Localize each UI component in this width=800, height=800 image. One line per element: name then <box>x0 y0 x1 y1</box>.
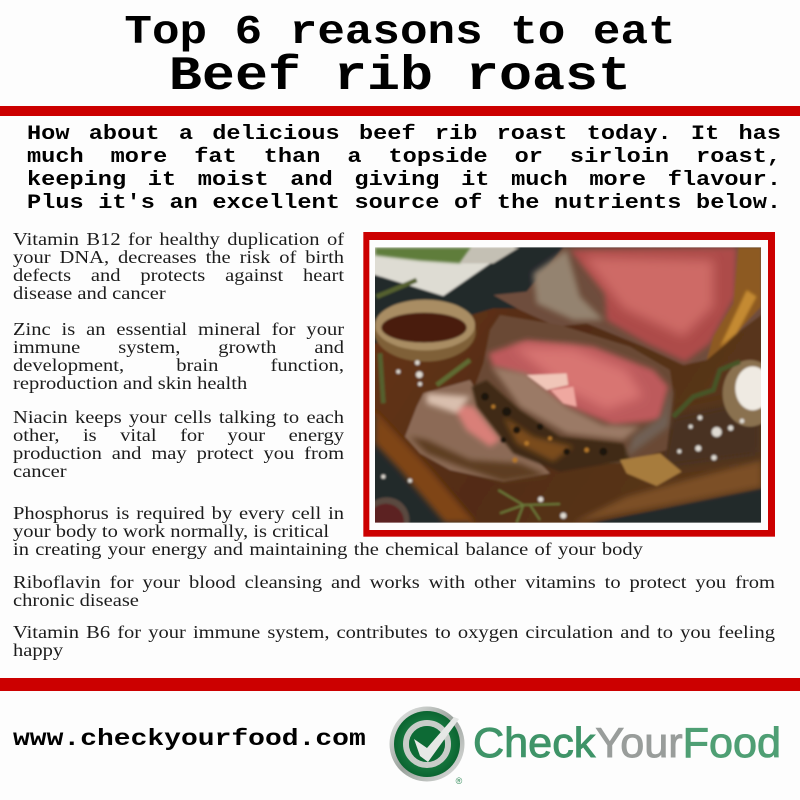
top red bar <box>0 106 800 116</box>
title line 1: Top 6 reasons to eat <box>124 10 676 56</box>
text: niacin: Niacin keeps your cells talking to each <box>13 407 344 427</box>
text: riboflavin <box>13 572 775 610</box>
website url: www.checkyourfood.com <box>13 726 366 752</box>
salt and pepper <box>381 360 744 519</box>
wood board <box>370 308 770 527</box>
logo: CheckYourFood <box>390 706 781 786</box>
text: vitamin B6 <box>13 622 775 660</box>
small slice <box>405 380 550 482</box>
text: niacin <box>13 407 344 481</box>
intro text <box>27 123 781 215</box>
text: niacin: production and may protect you from <box>13 443 344 463</box>
text: phosphorus: Phosphorus is required by every cell in <box>13 503 344 523</box>
text: niacin: other, is vital for your energy <box>13 425 344 445</box>
text: niacin: cancer <box>13 461 67 481</box>
text: vitamin B6: Vitamin B6 for your immune system, contributes to oxygen circulation and to you feeling <box>13 622 775 642</box>
text: vitamin B12: disease and cancer <box>13 283 166 303</box>
intro text: keeping it moist and giving it much more flavour. <box>27 169 781 192</box>
intro text: much more fat than a topside or sirloin roast, <box>27 146 781 169</box>
rosemary <box>498 490 560 523</box>
title <box>124 10 676 104</box>
thyme <box>673 362 740 417</box>
icon: check badge <box>390 706 464 786</box>
bottom red bar <box>0 678 800 691</box>
white bowl right <box>721 358 761 428</box>
back roast <box>493 247 763 365</box>
wordmark: CheckYourFood <box>473 719 781 766</box>
herb crust <box>472 380 630 472</box>
intro text: Plus it's an excellent source of the nutrients below. <box>27 192 781 215</box>
text: vitamin B12: your DNA, decreases the risk of birth <box>13 247 344 267</box>
peppercorn dish <box>375 496 410 523</box>
intro text: How about a delicious beef rib roast today. It has <box>27 123 781 146</box>
text: zinc: reproduction and skin health <box>13 373 247 393</box>
icon: check badge: ® <box>456 776 463 786</box>
photo frame: beef rib roast <box>363 232 775 537</box>
plate top left <box>370 243 519 296</box>
text: phosphorus: in creating your energy and maintaining the chemical balance of your body <box>13 539 643 559</box>
text: vitamin B6: happy <box>13 640 63 660</box>
text: vitamin B12: defects and protects against heart <box>13 265 344 285</box>
text: phosphorus <box>13 503 643 559</box>
text: zinc: Zinc is an essential mineral for your <box>13 319 344 339</box>
text: vitamin B12: Vitamin B12 for healthy duplication of <box>13 229 344 249</box>
text: zinc: immune system, growth and <box>13 337 344 357</box>
text: riboflavin: Riboflavin for your blood cleansing and works with other vitamins to protect you from <box>13 572 775 592</box>
text: zinc: development, brain function, <box>13 355 344 375</box>
text: zinc <box>13 319 344 393</box>
text: riboflavin: chronic disease <box>13 590 139 610</box>
title line 2: Beef rib roast <box>169 50 631 104</box>
text: phosphorus: your body to work normally, is critical <box>13 521 329 541</box>
sauce bowl <box>375 327 477 363</box>
front slice <box>473 315 673 463</box>
text: vitamin B12 <box>13 229 344 303</box>
